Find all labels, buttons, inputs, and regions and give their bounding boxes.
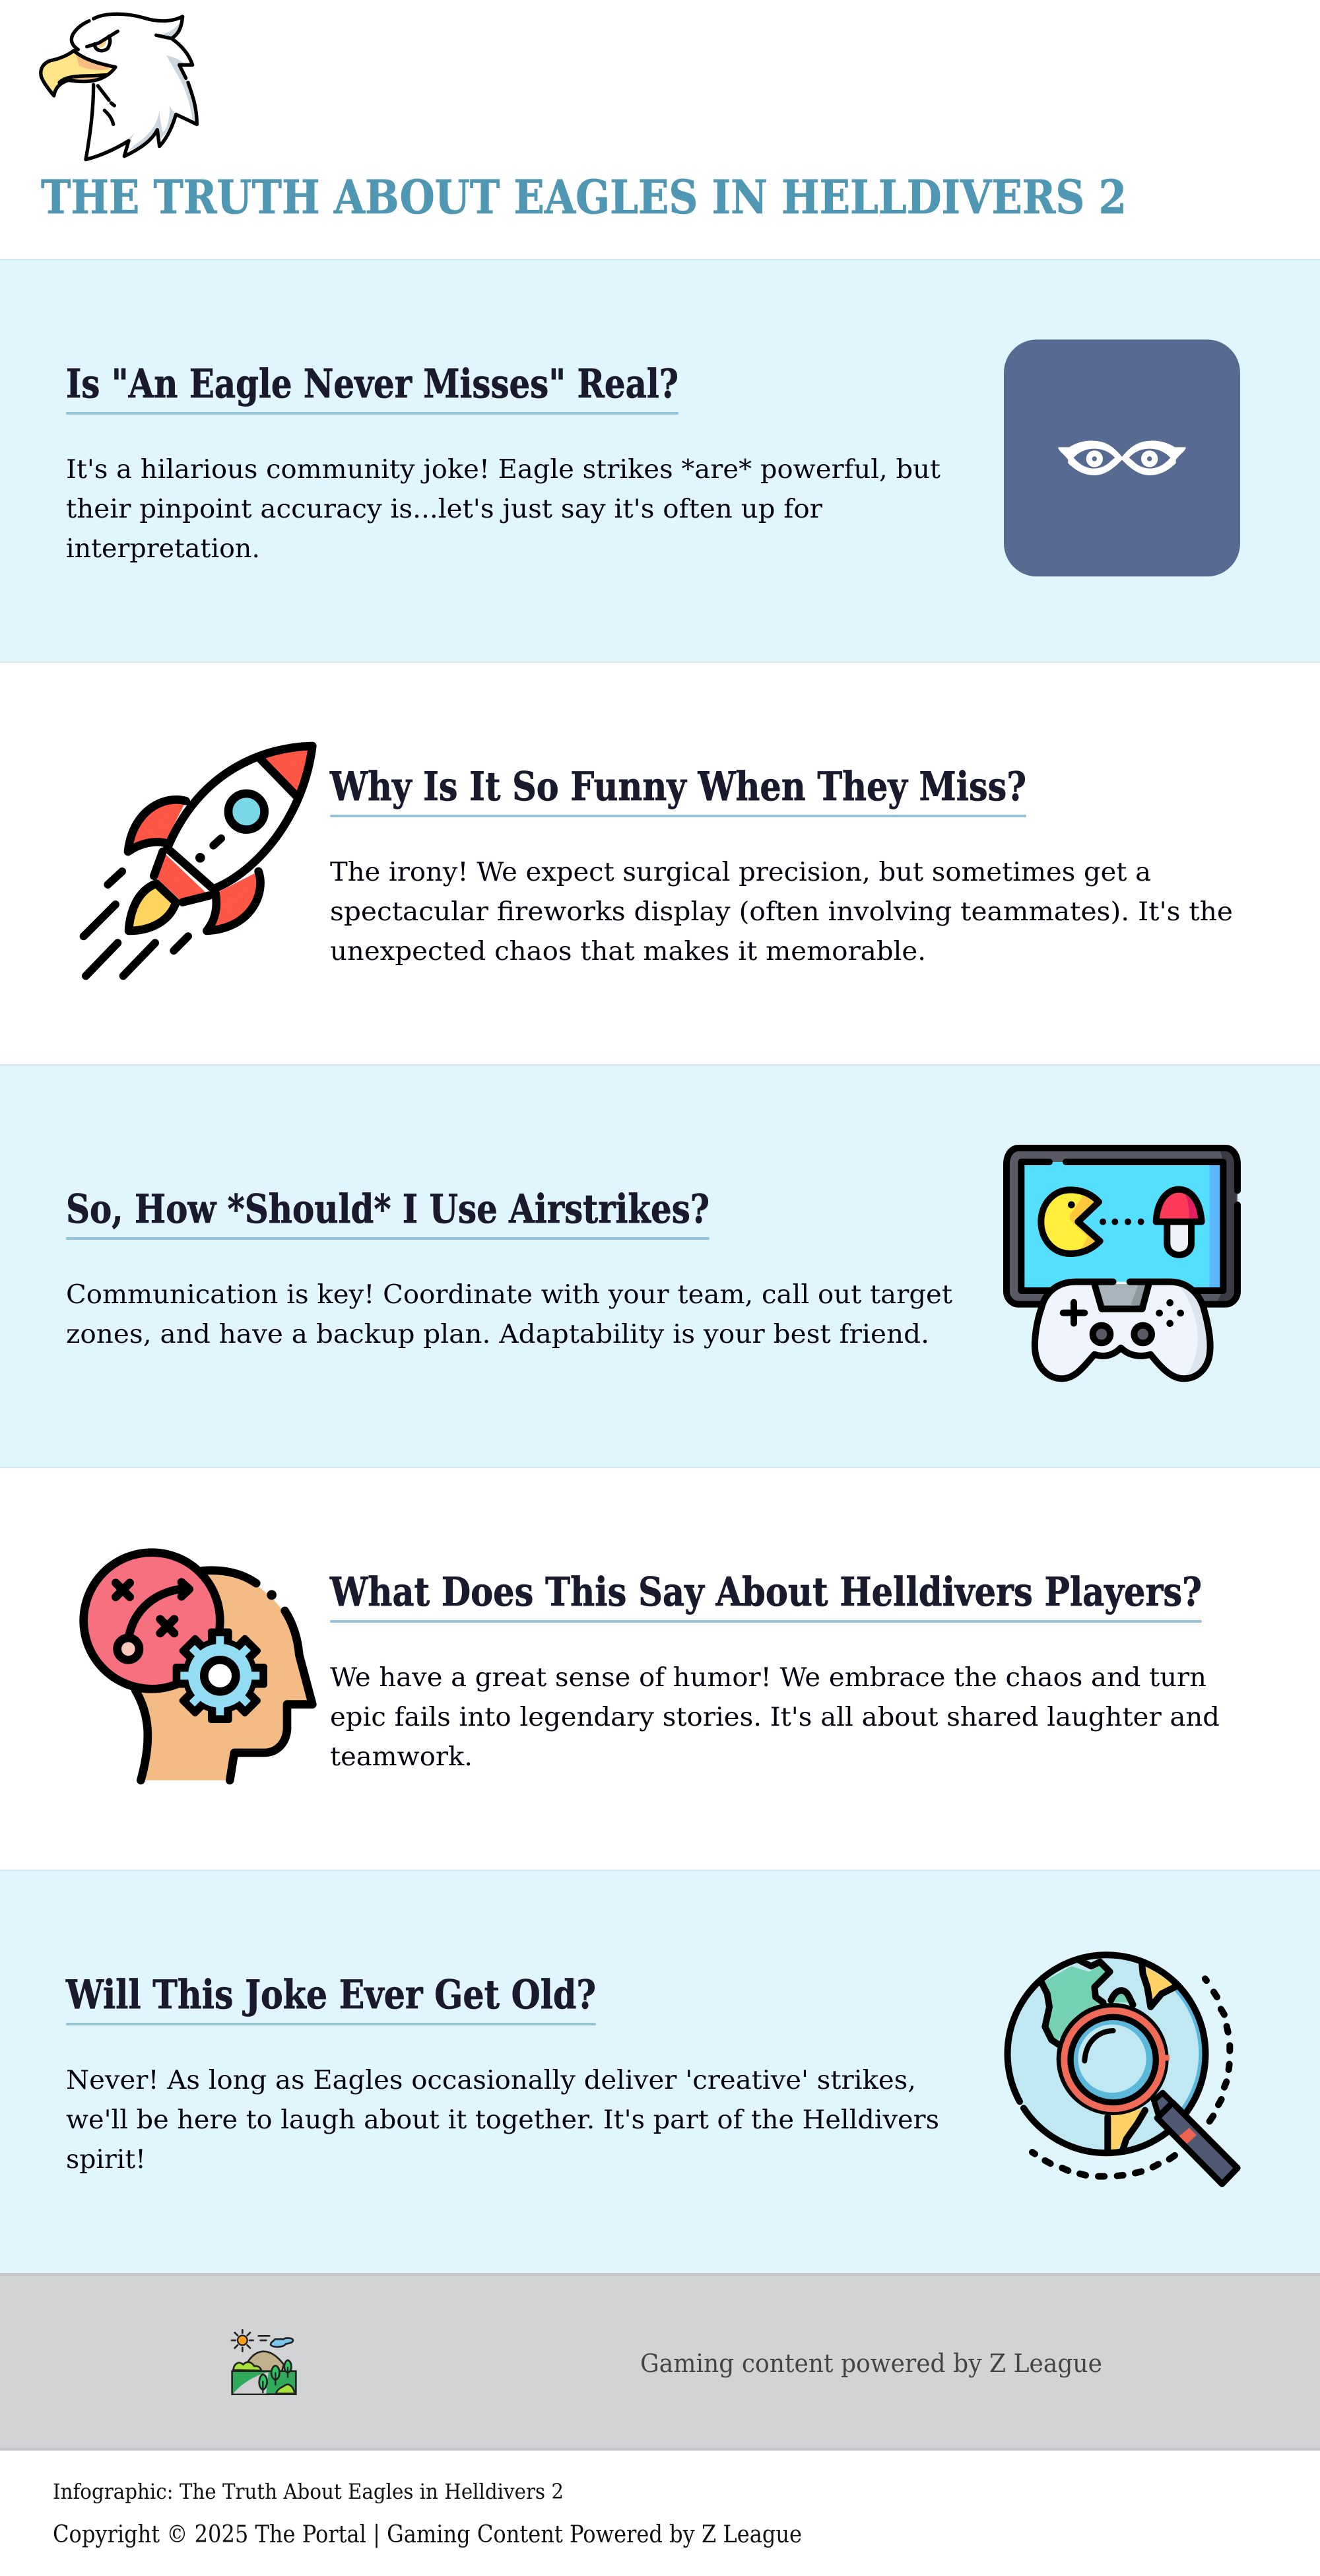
icon: globe with magnifying glass xyxy=(1006,1954,1238,2184)
copyright: Copyright © 2025 The Portal | Gaming Content Powered by Z League xyxy=(53,2521,802,2548)
body text: their pinpoint accuracy is...let's just say it's often up for xyxy=(66,494,822,524)
heading: Is "An Eagle Never Misses" Real? xyxy=(66,361,678,407)
panel: is an eagle never misses real xyxy=(0,259,1320,661)
panel: why is it so funny xyxy=(0,661,1320,1064)
body text: unexpected chaos that makes it memorable. xyxy=(330,937,926,966)
icon: eyes glasses tile xyxy=(1004,339,1240,576)
footer band xyxy=(0,2273,1320,2451)
icon: landscape xyxy=(232,2330,296,2394)
infographic credit: Infographic: The Truth About Eagles in Helldivers 2 xyxy=(53,2479,564,2504)
header xyxy=(41,14,1127,224)
body text: Never! As long as Eagles occasionally deliver 'creative' strikes, xyxy=(66,2066,916,2095)
icon: head with strategy and gear xyxy=(84,1553,312,1780)
body text xyxy=(330,1663,1220,1772)
body text: spectacular fireworks display (often involving teammates). It's the xyxy=(330,897,1233,927)
body text: We have a great sense of humor! We embrace the chaos and turn xyxy=(330,1663,1206,1693)
icon: rocket xyxy=(84,746,312,976)
panel: how should i use airstrikes xyxy=(0,1064,1320,1467)
body text: interpretation. xyxy=(66,534,260,564)
title: THE TRUTH ABOUT EAGLES IN HELLDIVERS 2 xyxy=(41,170,1127,224)
body text: spirit! xyxy=(66,2145,146,2175)
body text xyxy=(66,455,940,564)
body text: epic fails into legendary stories. It's all about shared laughter and xyxy=(330,1703,1220,1732)
body text: Communication is key! Coordinate with your team, call out target xyxy=(66,1280,952,1310)
panel: what does this say about helldivers players xyxy=(0,1467,1320,1870)
sponsor text: Gaming content powered by Z League xyxy=(640,2349,1102,2378)
body text: The irony! We expect surgical precision, but sometimes get a xyxy=(330,858,1151,887)
heading: Will This Joke Ever Get Old? xyxy=(65,1972,596,2018)
icon: eagle head xyxy=(41,14,197,160)
body text: zones, and have a backup plan. Adaptability is your best friend. xyxy=(66,1320,929,1349)
icon: game screen and controller xyxy=(1006,1148,1238,1378)
heading: So, How *Should* I Use Airstrikes? xyxy=(66,1186,710,1233)
body text: we'll be here to laugh about it together. It's part of the Helldivers xyxy=(66,2105,939,2135)
body text xyxy=(66,2066,939,2175)
body text xyxy=(330,858,1233,966)
body text: teamwork. xyxy=(330,1742,473,1772)
footer credits xyxy=(53,2479,802,2548)
body text xyxy=(66,1280,952,1349)
body text: It's a hilarious community joke! Eagle strikes *are* powerful, but xyxy=(66,455,940,485)
heading: Why Is It So Funny When They Miss? xyxy=(329,764,1026,810)
panel: will this joke ever get old xyxy=(0,1870,1320,2273)
